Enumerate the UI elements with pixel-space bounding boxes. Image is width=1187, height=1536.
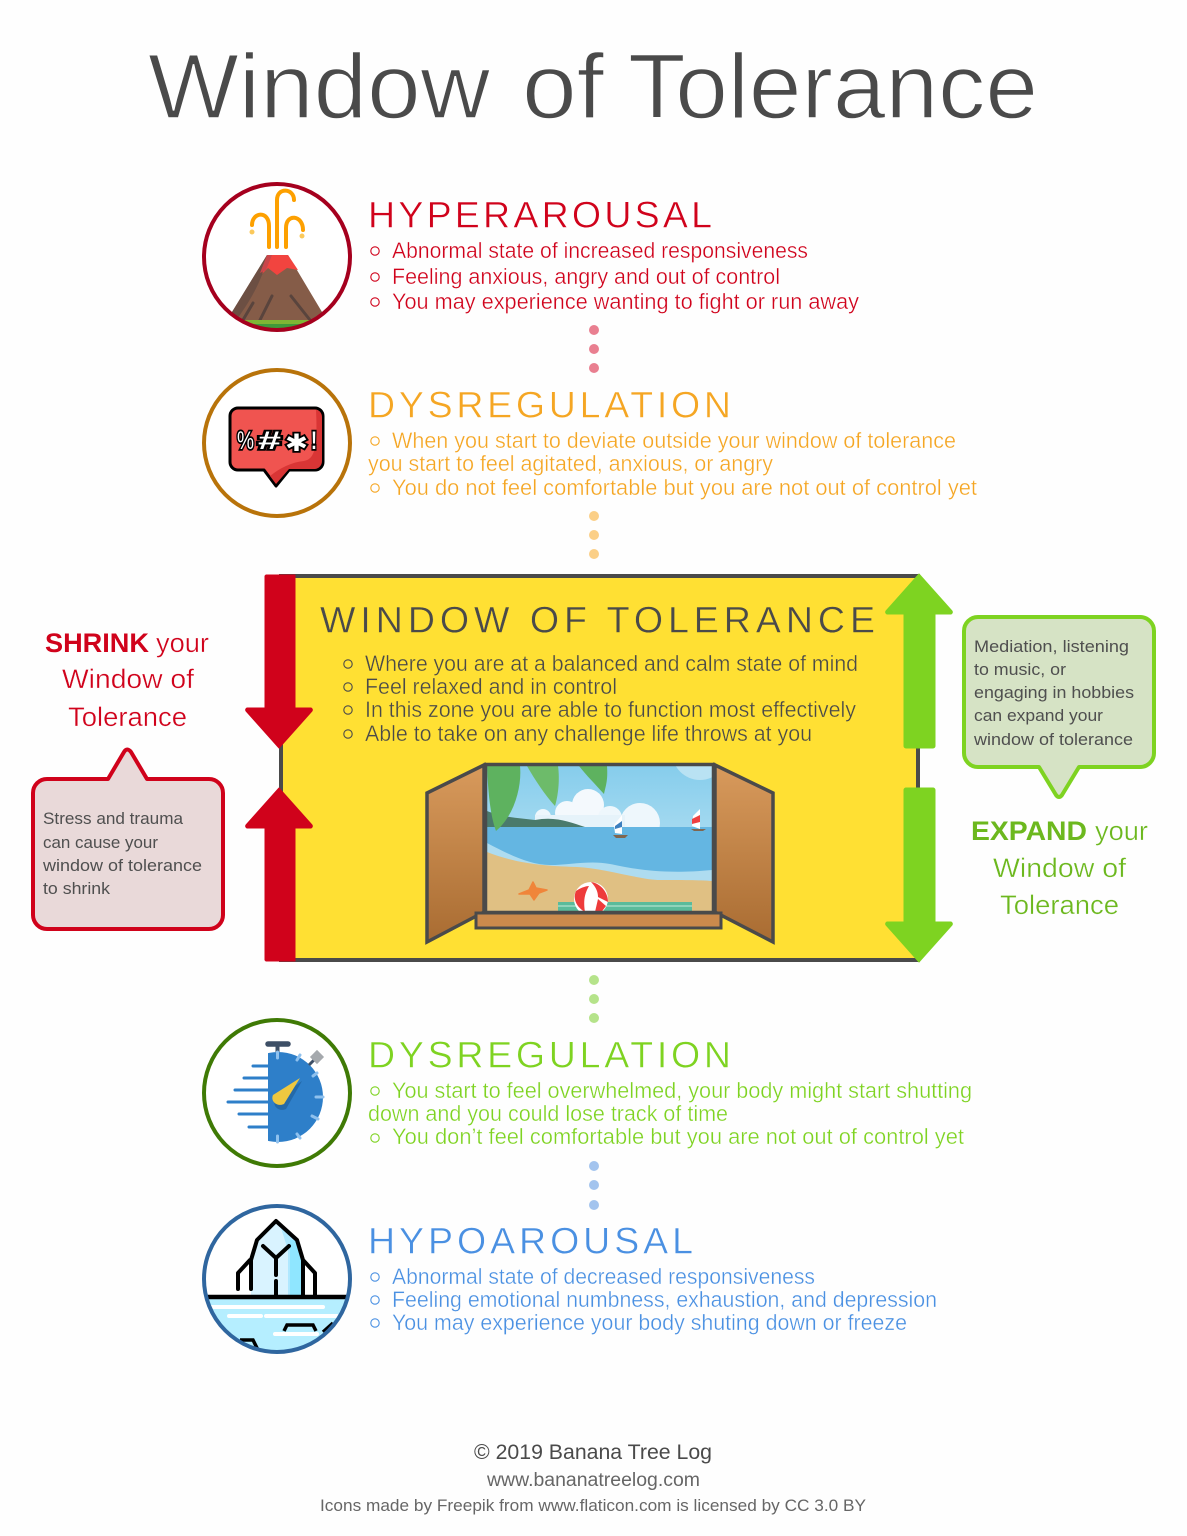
callout label: shrink [45, 628, 209, 732]
callout label: shrink: your [156, 628, 209, 658]
callout: expand explanation [964, 617, 1154, 797]
bullet list: hyperarousal: Abnormal state of increased responsiveness [392, 238, 808, 263]
callout: expand explanation: engaging in hobbies [974, 683, 1134, 702]
icon: iceberg [200, 1206, 354, 1357]
callout: expand explanation: can expand your [974, 706, 1103, 725]
title: Tolerance [628, 36, 1038, 138]
callout label: shrink: Tolerance [68, 702, 187, 732]
illustration: open window with beach view [425, 762, 775, 945]
callout label: expand: EXPAND [971, 816, 1087, 846]
title: of [522, 36, 604, 138]
section: upper dysregulation [204, 370, 977, 516]
bullet list: hypoarousal: You may experience your body shuting down or freeze [392, 1310, 907, 1335]
bullet list: hyperarousal [371, 238, 859, 314]
bullet list: window of tolerance: Feel relaxed and in control [365, 674, 617, 699]
icon: angry speech bubble: ! [311, 427, 317, 455]
connector dots: green [589, 975, 599, 1023]
icon: angry speech bubble [204, 370, 350, 516]
callout: expand explanation: window of tolerance [973, 730, 1133, 749]
callout label: shrink: Window of [62, 664, 195, 694]
title: Window [148, 36, 491, 138]
icon: angry speech bubble: # [258, 427, 281, 455]
icon: angry speech bubble: % [237, 427, 254, 455]
bullet list: hypoarousal: Abnormal state of decreased responsiveness [392, 1264, 815, 1289]
callout: expand explanation: to music, or [974, 660, 1066, 679]
text block: dysregulation: you start to feel agitated, anxious, or angry [368, 451, 773, 476]
heading: hyperarousal: HYPERAROUSAL [368, 194, 712, 236]
callout label: expand: Tolerance [1000, 890, 1119, 920]
bullet list: window of tolerance [344, 651, 858, 746]
text block: dysregulation: You don’t feel comfortable but you are not out of control yet [392, 1124, 964, 1149]
arrow: green down [886, 788, 952, 962]
callout: shrink explanation: window of tolerance [42, 856, 202, 875]
bullet list: hyperarousal: You may experience wanting to fight or run away [392, 289, 859, 314]
bullet list: window of tolerance: In this zone you are able to function most effectively [365, 697, 856, 722]
callout label: expand [971, 816, 1148, 920]
callout: expand explanation: Mediation, listening [974, 637, 1129, 656]
heading: dysregulation: DYSREGULATION [368, 1034, 731, 1076]
connector dots: orange [589, 511, 599, 559]
bullet list: window of tolerance: Able to take on any challenge life throws at you [365, 721, 812, 746]
footer: Icons made by Freepik from www.flaticon.com is licensed by CC 3.0 BY [320, 1496, 866, 1515]
callout label: shrink: SHRINK [45, 628, 149, 658]
callout label: expand: Window of [993, 853, 1127, 883]
callout: shrink explanation: can cause your [43, 833, 158, 852]
callout: shrink explanation: to shrink [43, 879, 111, 898]
connector dots: red [589, 325, 599, 373]
bullet list: hypoarousal [371, 1264, 937, 1335]
section: hyperarousal [204, 184, 859, 340]
arrow: red down [246, 575, 312, 748]
icon: stopwatch [204, 1020, 350, 1166]
title [148, 36, 1038, 138]
callout: shrink explanation: Stress and trauma [43, 809, 184, 828]
section: lower dysregulation [204, 1020, 972, 1166]
connector dots: blue [589, 1161, 599, 1210]
arrow: green up [886, 574, 952, 748]
bullet list: window of tolerance: Where you are at a balanced and calm state of mind [365, 651, 858, 676]
panel: window of tolerance [246, 574, 952, 962]
heading: hypoarousal: HYPOAROUSAL [368, 1220, 693, 1262]
text block: dysregulation: You do not feel comfortable but you are not out of control yet [392, 475, 977, 500]
text block: dysregulation [368, 1078, 972, 1149]
callout label: expand: your [1095, 816, 1148, 846]
icon: angry speech bubble: ✱ [285, 430, 308, 457]
footer: www.bananatreelog.com [486, 1470, 700, 1491]
heading: dysregulation: DYSREGULATION [368, 384, 731, 426]
heading: window of tolerance: WINDOW OF TOLERANCE [320, 598, 875, 640]
bullet list: hyperarousal: Feeling anxious, angry and out of control [392, 264, 780, 289]
text block: dysregulation: When you start to deviate outside your window of tolerance [392, 428, 956, 453]
icon: volcano [204, 184, 350, 340]
footer: © 2019 Banana Tree Log [474, 1441, 712, 1464]
text block: dysregulation: down and you could lose track of time [368, 1101, 728, 1126]
callout: shrink explanation [33, 750, 223, 929]
arrow: red up [246, 788, 312, 961]
section: hypoarousal [200, 1206, 937, 1357]
text block: dysregulation: You start to feel overwhelmed, your body might start shutting [392, 1078, 972, 1103]
footer [320, 1441, 866, 1515]
bullet list: hypoarousal: Feeling emotional numbness, exhaustion, and depression [392, 1287, 937, 1312]
text block: dysregulation [368, 428, 977, 500]
